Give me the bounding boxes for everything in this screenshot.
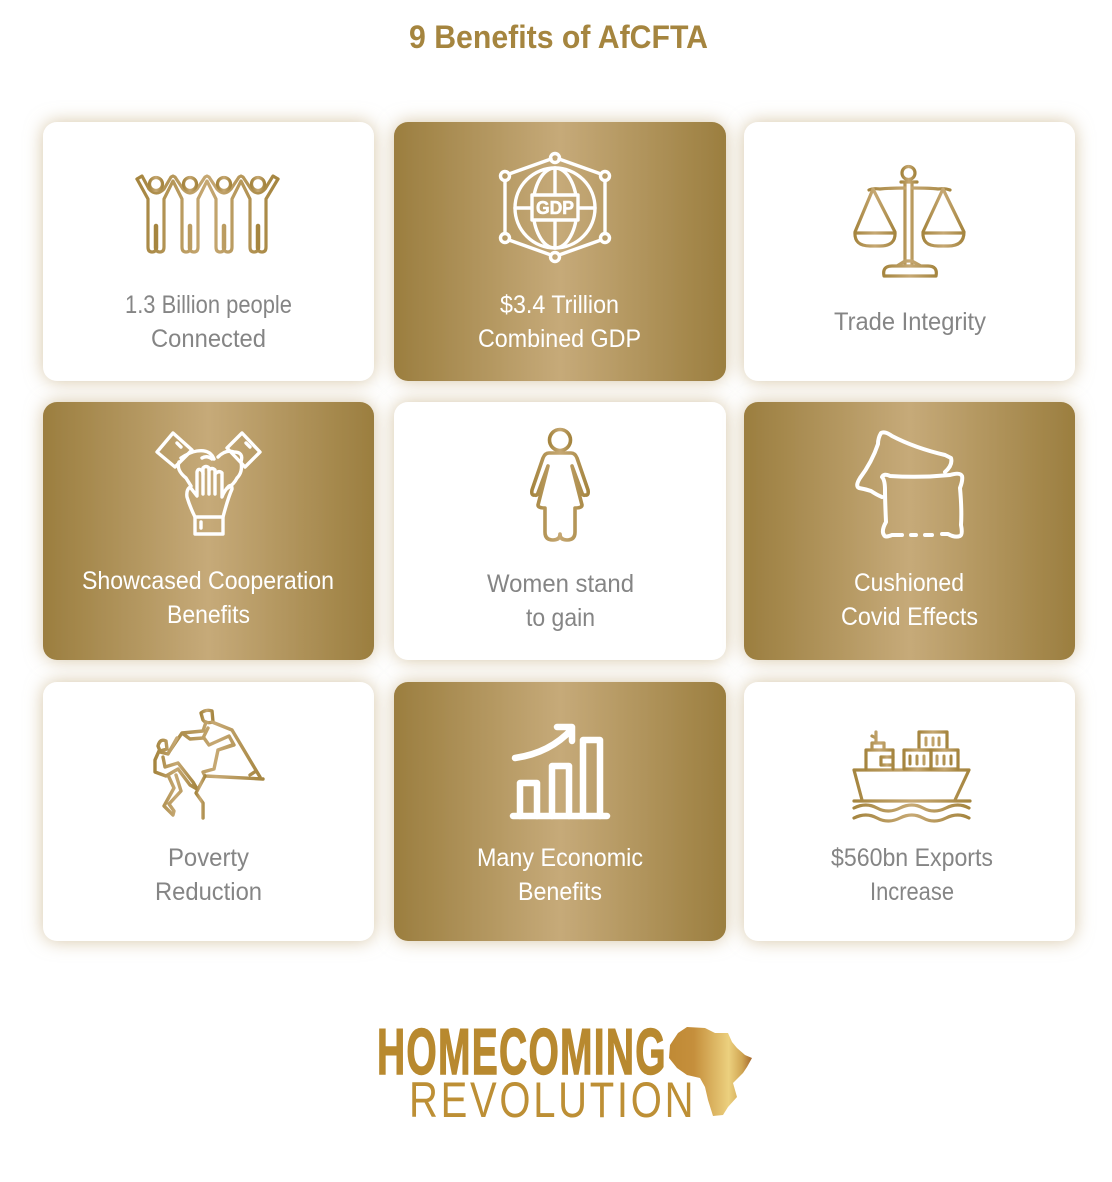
label: poverty	[155, 844, 262, 906]
icon: rising bar chart	[513, 727, 607, 816]
label: cushioned: Covid Effects	[841, 603, 978, 631]
label: women: to gain	[526, 604, 595, 632]
label: exports	[831, 844, 993, 906]
panel: poverty reduction	[43, 682, 374, 941]
label: economic benefits	[477, 844, 643, 906]
icon: GDP globe: GDP	[536, 198, 574, 218]
icon: people with raised arms	[137, 176, 278, 252]
label: cooperation: Showcased Cooperation	[82, 567, 334, 595]
panel: women stand to gain	[394, 402, 726, 660]
logo: Homecoming Revolution	[377, 1016, 752, 1128]
label: economic benefits: Many Economic	[477, 844, 643, 872]
label: cooperation	[82, 567, 334, 629]
icon: scales	[855, 166, 964, 276]
label: economic benefits: Benefits	[518, 878, 602, 906]
icon: climbers	[155, 710, 263, 818]
panel: combined GDP	[394, 122, 726, 381]
label: cushioned: Cushioned	[854, 569, 964, 597]
panel: cushioned covid effects	[744, 402, 1075, 660]
label: exports: Increase	[870, 878, 954, 906]
label: people connected: 1.3 Billion people	[125, 291, 292, 319]
icon: woman	[532, 430, 588, 540]
label: GDP: Combined GDP	[478, 325, 641, 353]
icon: pillows	[857, 432, 962, 537]
panel: trade integrity	[744, 122, 1075, 381]
logo: Homecoming Revolution: REVOLUTION	[409, 1072, 696, 1128]
label: cooperation: Benefits	[167, 601, 250, 629]
label: women	[487, 570, 634, 632]
panel: exports increase	[744, 682, 1075, 941]
label: poverty: Poverty	[168, 844, 249, 872]
panel: many economic benefits	[394, 682, 726, 941]
icon: joined hands	[157, 433, 260, 534]
label: people connected	[125, 291, 292, 353]
label: women: Women stand	[487, 570, 634, 598]
title: 9 Benefits of AfCFTA	[409, 19, 708, 55]
panel: 1.3 billion people connected	[43, 122, 374, 381]
panel: cooperation benefits	[43, 402, 374, 660]
icon: GDP globe	[500, 154, 610, 262]
logo: Homecoming Revolution: HOMECOMING	[377, 1016, 667, 1089]
icon: container ship	[854, 732, 970, 821]
label: exports: $560bn Exports	[831, 844, 993, 872]
label: cushioned	[841, 569, 978, 631]
label: people connected: Connected	[151, 325, 266, 353]
icon: Africa map	[669, 1027, 752, 1116]
label: trade integrity: Trade Integrity	[834, 308, 986, 336]
label: GDP: $3.4 Trillion	[500, 291, 619, 319]
label: GDP	[478, 291, 641, 353]
label: poverty: Reduction	[155, 878, 262, 906]
